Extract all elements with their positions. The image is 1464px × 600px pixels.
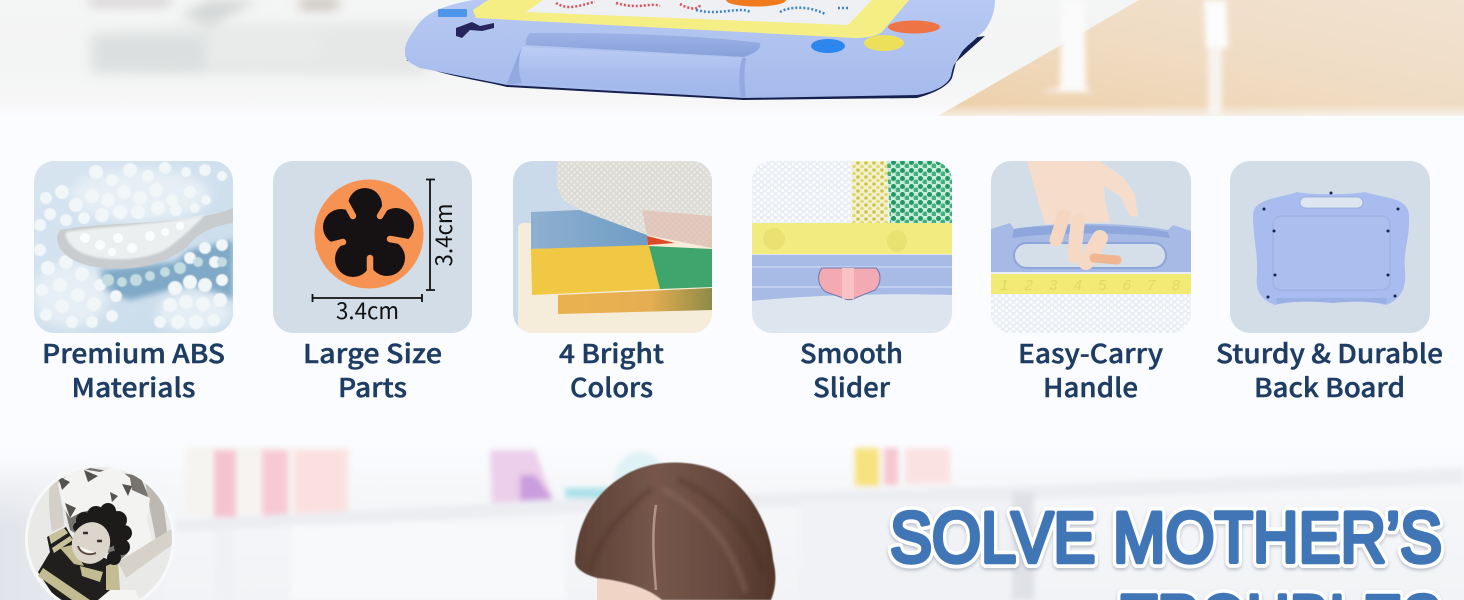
dimension: height: 3.4cm xyxy=(425,204,459,266)
caption: Back Board xyxy=(1254,368,1405,405)
pellets in spoon xyxy=(66,215,205,259)
spoon xyxy=(57,208,233,269)
bottom photo: mother at shelf xyxy=(0,443,1464,600)
red layer xyxy=(647,236,675,245)
feature: sturdy and durable back board xyxy=(1216,161,1443,405)
woman's forehead xyxy=(597,577,662,600)
yellow marks xyxy=(852,161,888,223)
caption: Materials xyxy=(72,368,196,405)
blue layer xyxy=(531,210,648,249)
handle front xyxy=(519,47,742,97)
caption xyxy=(1216,334,1443,405)
caption xyxy=(1018,334,1163,405)
handle seams xyxy=(506,47,746,98)
blurred bookshelf xyxy=(175,447,1464,600)
yellow ruler xyxy=(752,223,952,254)
dimension: height xyxy=(425,180,459,290)
ruler numbers: 1 2 3 4 5 6 7 8 xyxy=(1000,277,1181,294)
wooden floor xyxy=(938,0,1464,116)
caption xyxy=(800,334,903,405)
paper folds xyxy=(58,470,132,518)
dark backdrop xyxy=(58,468,148,560)
photo: colored layers xyxy=(513,161,718,338)
feature: smooth slider xyxy=(752,161,952,405)
photo: plastic pellets and spoon xyxy=(32,161,233,333)
magnet: blue square xyxy=(438,9,467,17)
magnet: orange numeral xyxy=(888,20,940,34)
left raised arm xyxy=(49,480,64,532)
boy portrait medallion xyxy=(25,464,176,600)
yellow frame xyxy=(473,0,909,38)
drawing board xyxy=(405,0,995,100)
caption: Colors xyxy=(570,368,653,405)
handle opening xyxy=(1014,243,1166,268)
green layer xyxy=(649,246,712,289)
icon: orange knob with flower xyxy=(314,180,424,288)
caption xyxy=(303,334,442,405)
caption: 4 Bright xyxy=(559,334,664,371)
amber layer xyxy=(558,288,712,314)
blue slide rail xyxy=(752,255,952,301)
white furniture legs xyxy=(1040,0,1228,114)
background wall xyxy=(0,443,1464,600)
feature: premium ABS materials xyxy=(32,161,233,405)
caption: Handle xyxy=(1043,368,1138,405)
fingers xyxy=(1056,215,1117,262)
far arm at right xyxy=(146,484,167,538)
writing surface xyxy=(526,0,872,25)
caption: Sturdy & Durable xyxy=(1216,334,1443,371)
feature: easy-carry handle xyxy=(991,161,1191,405)
caption xyxy=(42,334,225,405)
table background xyxy=(0,0,1464,116)
caption: Easy-Carry xyxy=(1018,334,1163,371)
caption: Smooth xyxy=(800,334,903,371)
caption: Premium ABS xyxy=(42,334,225,371)
bottom fade xyxy=(0,104,1464,122)
handle recess xyxy=(526,33,760,57)
ruler glyphs xyxy=(763,228,907,252)
blue board body xyxy=(405,0,995,98)
dimension: width: 3.4cm xyxy=(336,292,399,326)
pale pellet haze xyxy=(32,169,233,332)
doodles xyxy=(556,2,848,14)
blurred papers on table xyxy=(88,0,450,76)
card background xyxy=(1230,161,1430,333)
shelf board xyxy=(175,468,1464,532)
back board xyxy=(1253,192,1409,305)
magnet: dark flower xyxy=(456,22,494,38)
mesh surface xyxy=(991,294,1191,333)
photo: hand lifting handle xyxy=(991,161,1191,333)
orange knob xyxy=(726,0,786,6)
cream sheet xyxy=(518,223,718,338)
face xyxy=(66,517,116,569)
tinted mesh corner xyxy=(642,210,712,248)
eyes and smile xyxy=(83,533,102,541)
blue handle xyxy=(991,223,1191,273)
caption: Large Size xyxy=(303,334,442,371)
outstretched right arm xyxy=(118,528,176,578)
title: solve mother's troubles xyxy=(890,499,1442,600)
yellow layer xyxy=(531,245,660,295)
dimension: width xyxy=(312,292,422,326)
green marks xyxy=(887,161,952,223)
magnet: yellow eight xyxy=(864,35,904,51)
card background xyxy=(273,161,472,333)
photo: slider close-up xyxy=(752,161,952,333)
hair parting xyxy=(653,505,656,590)
magnet: blue nine xyxy=(811,39,845,53)
crumpled paper xyxy=(58,466,152,558)
top photo: board on a table xyxy=(0,0,1464,122)
left shading xyxy=(0,482,56,600)
board shadow xyxy=(406,36,985,100)
pink slider knob xyxy=(819,268,880,300)
woman's hair xyxy=(575,463,775,600)
cabinet posts xyxy=(215,530,235,600)
striped shirt xyxy=(38,527,119,600)
hand back xyxy=(1027,161,1138,224)
caption: Parts xyxy=(338,368,407,405)
curly hair xyxy=(73,503,132,565)
feature: large size parts xyxy=(273,161,472,405)
feature: 4 bright colors xyxy=(513,161,718,405)
mesh surface xyxy=(752,161,890,223)
white object at bottom xyxy=(98,590,140,600)
yellow ruler xyxy=(991,274,1191,294)
caption: Slider xyxy=(813,368,890,405)
caption xyxy=(559,334,664,405)
hair strands xyxy=(590,480,762,590)
mesh sheet xyxy=(557,161,712,248)
